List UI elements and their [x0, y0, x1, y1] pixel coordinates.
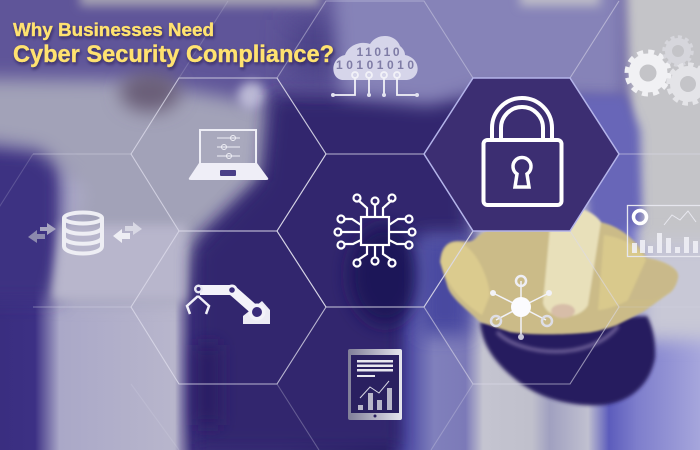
title: Why Businesses Need [13, 20, 214, 40]
icon: microchip circuit [334, 194, 416, 266]
icon: cloud data: 11010 [356, 45, 400, 59]
icon: padlock [484, 98, 562, 205]
sleeve [480, 316, 655, 405]
icon: cloud data: 10101010 [336, 58, 414, 72]
icon: chart panel [628, 206, 700, 256]
icon: robot arm [187, 284, 270, 324]
cuff highlight [497, 326, 618, 352]
highlighted hexagon [424, 78, 619, 231]
icon: laptop with sliders [189, 130, 268, 180]
title [13, 20, 334, 68]
icon: tablet report [348, 349, 402, 420]
icon: network nodes [490, 276, 552, 340]
hand [440, 205, 678, 334]
icon: gears [627, 37, 700, 104]
title: Cyber Security Compliance? [13, 41, 334, 68]
icon: database with arrows [28, 212, 142, 254]
icon: cloud data [331, 36, 419, 97]
